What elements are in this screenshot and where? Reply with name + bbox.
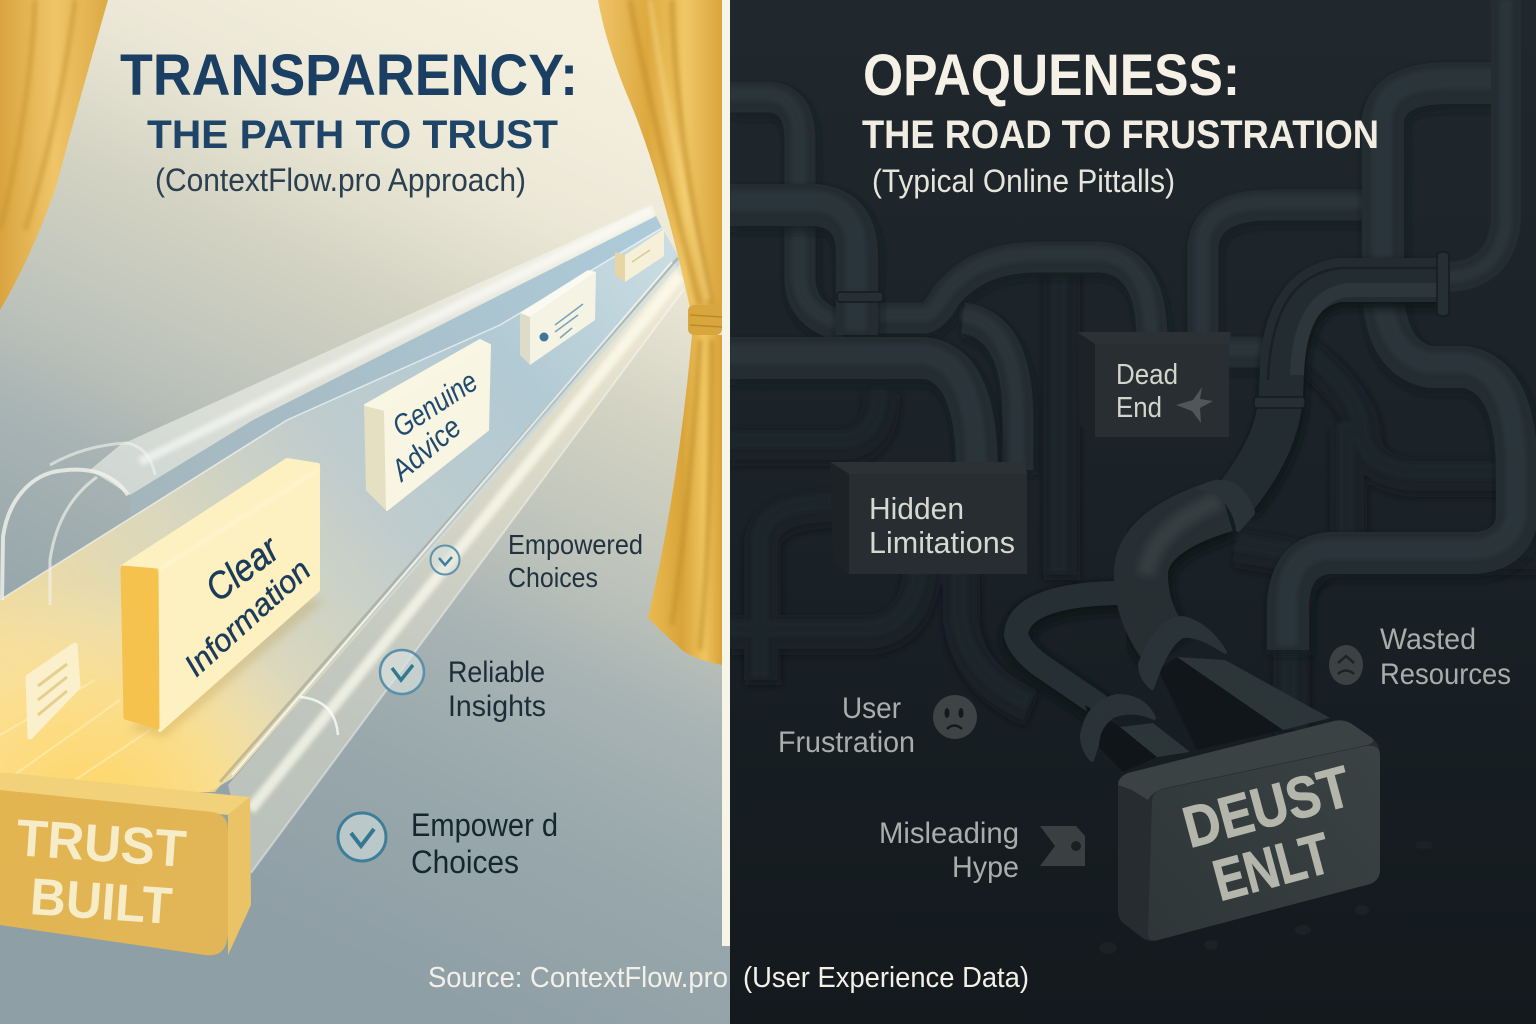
second loop pipe bbox=[1016, 592, 1136, 711]
text: hidden limitations: Limitations bbox=[869, 525, 1015, 560]
text: dead end: End bbox=[1116, 392, 1162, 424]
label: misleading hype bbox=[879, 817, 1019, 884]
icon: wasted resources bbox=[1329, 645, 1363, 685]
title: transparency: TRANSPARENCY: bbox=[120, 43, 578, 108]
text: enlt: ENLT bbox=[1207, 821, 1337, 914]
label: reliable insights: Reliable bbox=[448, 656, 545, 689]
label: empowered choices upper: Empowered bbox=[508, 529, 643, 560]
floor debris bbox=[1099, 841, 1433, 954]
label: reliable insights bbox=[450, 660, 545, 722]
label: user frustration: User bbox=[842, 692, 901, 725]
caption: contextflow approach: (ContextFlow.pro Approach) bbox=[155, 162, 526, 198]
label: misleading hype: Hype bbox=[952, 851, 1019, 884]
floor glow bbox=[0, 634, 270, 792]
card: note bbox=[520, 270, 596, 365]
panel: opaqueness bbox=[729, 0, 1536, 1024]
pipe band clamps bbox=[1082, 482, 1253, 760]
text: deust: DEUST bbox=[1176, 754, 1357, 861]
pipe network dim bbox=[729, 262, 1536, 735]
right curtain upper bbox=[598, 0, 722, 310]
subtitle: road to frustration: THE ROAD TO FRUSTRATION bbox=[862, 113, 1379, 157]
text: dead end bbox=[1116, 359, 1178, 424]
icon: check large bbox=[338, 813, 386, 861]
label: user frustration bbox=[778, 692, 915, 759]
lower strap pipe bbox=[1085, 705, 1190, 772]
box: hidden limitations bbox=[830, 462, 1027, 574]
card: clear information bbox=[122, 460, 325, 738]
label: wasted resources: Resources bbox=[1380, 658, 1511, 691]
label: reliable insights: Insights bbox=[448, 690, 546, 723]
center divider bbox=[722, 0, 730, 946]
text: genuine: Genuine bbox=[387, 365, 484, 444]
card: distant bbox=[615, 229, 664, 282]
central main pipe bbox=[1235, 268, 1442, 503]
plate: deust enlt bbox=[1118, 720, 1380, 941]
icon: sad face bbox=[933, 695, 977, 739]
source line: Source: ContextFlow.pro bbox=[428, 962, 728, 994]
card: genuine advice bbox=[365, 340, 490, 510]
icon: check medium bbox=[380, 650, 424, 694]
label: empowered choices upper: Choices bbox=[508, 562, 598, 593]
pipe clamps bbox=[837, 252, 1449, 408]
text: information: Information bbox=[177, 552, 317, 683]
right curtain lower bbox=[648, 335, 722, 665]
icon: check small bbox=[430, 546, 460, 574]
caption: typical pitfalls: (Typical Online Pittalls) bbox=[872, 163, 1175, 199]
curtain tie bbox=[688, 305, 722, 335]
track floor bbox=[0, 228, 682, 792]
label: misleading hype: Misleading bbox=[879, 817, 1019, 850]
label: empowered choices lower: Choices bbox=[411, 844, 519, 880]
source line bbox=[428, 962, 1029, 994]
subtitle: path to trust: THE PATH TO TRUST bbox=[147, 113, 558, 157]
icon: document card bbox=[28, 645, 78, 737]
left curtain bbox=[0, 0, 108, 310]
text: clear: Clear bbox=[198, 528, 288, 610]
pipe network thick bbox=[729, 79, 1519, 655]
label: empowered choices upper bbox=[509, 534, 642, 588]
label: wasted resources: Wasted bbox=[1380, 623, 1476, 656]
text: trust: TRUST bbox=[14, 809, 188, 879]
text: advice: Advice bbox=[384, 411, 468, 489]
pipe network thin bbox=[729, 94, 1387, 475]
box: dead end bbox=[1077, 332, 1231, 437]
text: hidden limitations bbox=[869, 491, 1015, 560]
big foreground pipe bbox=[1141, 500, 1330, 750]
text: hidden limitations: Hidden bbox=[869, 491, 964, 526]
title: opaqueness: OPAQUENESS: bbox=[863, 43, 1240, 108]
source line: (User Experience Data) bbox=[743, 962, 1029, 994]
text: dead end: Dead bbox=[1116, 359, 1178, 391]
panel: transparency bbox=[0, 0, 730, 1024]
upper glass tube bbox=[2, 205, 656, 605]
blue strip bbox=[130, 216, 662, 516]
block: trust built bbox=[0, 773, 251, 955]
floor lines bbox=[0, 680, 150, 790]
floor edge line bbox=[3, 228, 662, 598]
icon: misleading hype bbox=[1040, 826, 1085, 866]
label: user frustration: Frustration bbox=[778, 726, 915, 759]
label: wasted resources bbox=[1380, 623, 1511, 691]
panel background bbox=[0, 0, 730, 1024]
label: empowered choices lower: Empower d bbox=[411, 807, 558, 843]
top right riser pipe bbox=[1450, 0, 1516, 292]
panel background bbox=[730, 0, 1536, 168]
text: built: BUILT bbox=[28, 868, 174, 936]
label: empowered choices lower bbox=[412, 812, 556, 874]
lower glass tube bbox=[220, 258, 684, 873]
icon: dead end cross bbox=[1176, 387, 1213, 423]
